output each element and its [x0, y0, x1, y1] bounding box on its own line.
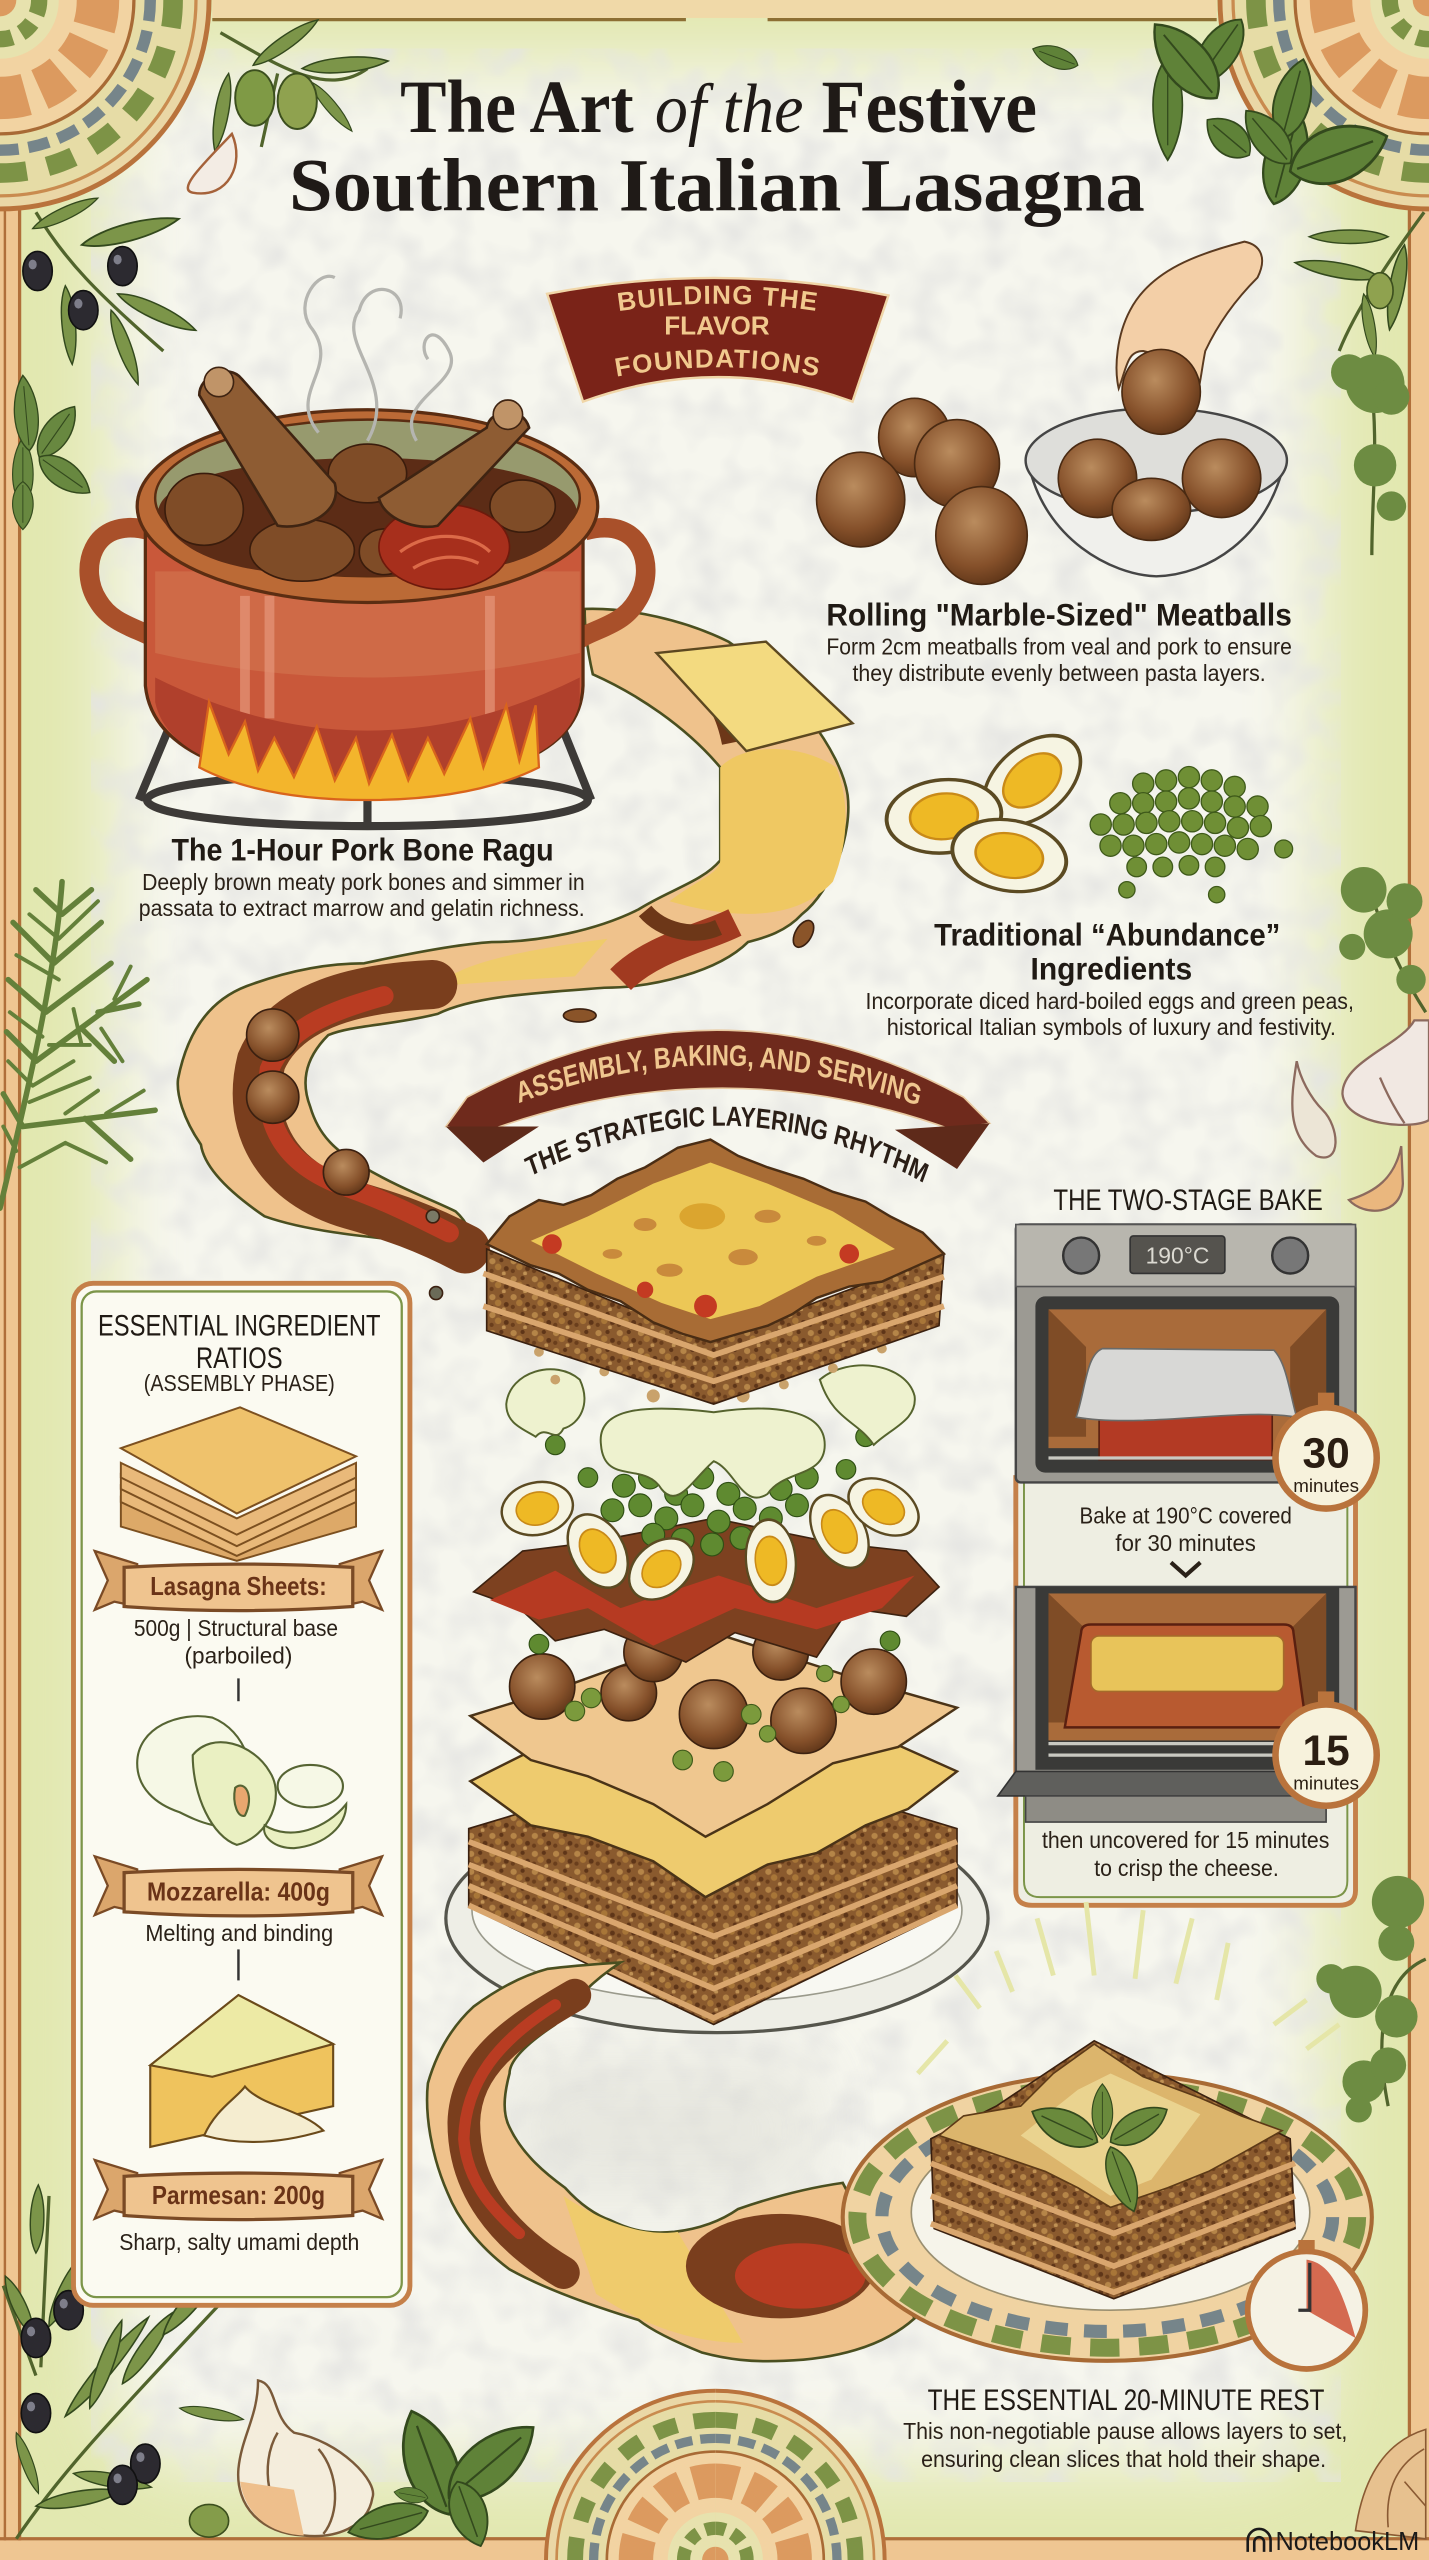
icon: twenty minute clock [1248, 2240, 1365, 2369]
hand holding meatball [1117, 242, 1262, 405]
text: panel heading: RATIOS [196, 1342, 283, 1375]
foliage: bottom left olive branch [0, 2185, 244, 2539]
text: rest description [903, 2418, 1347, 2472]
meatballs layer [510, 1623, 906, 1753]
text: ragu description [139, 869, 585, 921]
panel: two-stage bake [998, 1224, 1377, 1905]
corner tile: top left [0, 0, 209, 209]
illustration: hard-boiled eggs [884, 718, 1097, 900]
pot handles [89, 528, 646, 645]
text: meatballs heading: Rolling "Marble-Sized" Meatballs [826, 597, 1292, 632]
top baked lasagna body [487, 1249, 944, 1404]
pot rim and stew [137, 410, 598, 602]
banner: building the flavor foundations: BUILDING THE [618, 286, 817, 311]
oven: stage one: 190°C [1146, 1243, 1209, 1269]
text: stage two caption [1042, 1827, 1329, 1881]
text: stage one caption: Bake at 190°C covered [1080, 1502, 1292, 1528]
label: lasagna sheets [95, 1551, 382, 1611]
foliage: right parsley upper [1331, 354, 1409, 555]
illustration: rays above resting slice [918, 1902, 1339, 2073]
text: ragu heading: The 1-Hour Pork Bone Ragu [171, 832, 554, 867]
text: abundance heading: Ingredients [1031, 952, 1192, 987]
title [289, 66, 1145, 228]
icon: garlic bulb bottom [238, 2380, 373, 2536]
label: mozzarella: Mozzarella: 400g [147, 1876, 330, 1906]
banner: assembly baking and serving [444, 1029, 992, 1169]
text: rest heading: THE ESSENTIAL 20-MINUTE REST [928, 2384, 1325, 2417]
text: meatballs description: they distribute evenly between pasta layers. [853, 660, 1266, 686]
timer: 30 minutes [1275, 1393, 1377, 1509]
pasta sheet on ribbon upper [657, 642, 853, 751]
illustration: finished lasagna on tiled plate [843, 2041, 1372, 2361]
label: parmesan: Parmesan: 200g [152, 2180, 325, 2210]
corner tile: bottom centre [546, 2391, 885, 2560]
pork bones [199, 371, 336, 527]
illustration: ragu pot on burner [89, 276, 646, 826]
ornament: bottom right filigree [1356, 2429, 1426, 2539]
steam [305, 276, 452, 441]
text: lasagna sheets detail: (parboiled) [185, 1643, 292, 1669]
text: abundance heading: Traditional “Abundance” [934, 917, 1280, 952]
icon: garlic right [1292, 1020, 1429, 1211]
timer: 30 minutes: minutes [1293, 1475, 1359, 1496]
decorated plate [843, 2073, 1372, 2361]
foliage: left basil [11, 374, 97, 530]
corner tile: top right [1220, 0, 1429, 209]
text: stage two caption: then uncovered for 15 minutes [1042, 1827, 1329, 1853]
title: The Art [400, 66, 634, 149]
text: ragu description: passata to extract marrow and gelatin richness. [139, 895, 585, 921]
small peas on sheet [565, 1665, 849, 1781]
ragu layer [474, 1518, 939, 1662]
text: lasagna sheets detail: 500g | Structural base [134, 1615, 338, 1641]
text: meatballs description: Form 2cm meatballs from veal and pork to ensure [826, 634, 1292, 660]
text: abundance description: historical Italian symbols of luxury and festivity. [887, 1014, 1336, 1040]
meatball pasta sheet [470, 1633, 957, 1837]
pot body [145, 519, 583, 787]
text: parmesan detail: Sharp, salty umami depth [119, 2229, 359, 2255]
pasta ribbon flowing from pot to layered lasagna [178, 609, 848, 1256]
illustration: meatballs and bowl [817, 242, 1287, 584]
bowl [1029, 465, 1284, 576]
foliage: bottom basil [344, 2403, 548, 2552]
foliage: left olive branch [23, 193, 199, 387]
oven: stage one [1016, 1224, 1356, 1482]
foliage: top left olive branch [208, 14, 389, 152]
text: stage one caption: for 30 minutes [1115, 1530, 1256, 1556]
label: parmesan [95, 2160, 382, 2220]
icon: mozzarella [137, 1716, 346, 1848]
flames [199, 702, 539, 800]
banner: assembly baking and serving: ASSEMBLY, BAKING, AND SERVING [519, 1045, 921, 1104]
basil garnish [1025, 2084, 1174, 2216]
text: strategic layering rhythm: THE STRATEGIC LAYERING RHYTHM [524, 1106, 929, 1182]
oven: stage two [998, 1587, 1364, 1822]
banner: building the flavor foundations [546, 276, 890, 404]
icon: parmesan wedge [150, 1995, 333, 2147]
text: panel heading: ESSENTIAL INGREDIENT [98, 1310, 381, 1343]
text: panel heading: (ASSEMBLY PHASE) [144, 1370, 335, 1396]
green peas layer [529, 1427, 900, 1654]
text: panel heading [98, 1310, 381, 1396]
text: stage two caption: to crisp the cheese. [1094, 1855, 1279, 1881]
label: lasagna sheets: Lasagna Sheets: [150, 1571, 327, 1601]
text: rest description: ensuring clean slices that hold their shape. [921, 2446, 1326, 2472]
foliage: right parsley lower [1316, 1876, 1426, 2122]
crumbs [534, 1344, 887, 1402]
illustration: green peas [1090, 767, 1293, 903]
text: ragu description: Deeply brown meaty pork bones and simmer in [142, 869, 585, 895]
lasagna slice [931, 2041, 1295, 2299]
banner: building the flavor foundations: FLAVOR [664, 311, 770, 341]
foliage: right olive branch [1294, 212, 1424, 359]
top cheese surface [487, 1140, 944, 1342]
essential ingredient ratios panel [73, 1283, 410, 2305]
title: of the [655, 70, 804, 148]
bottom meat stack [469, 1755, 957, 2024]
plate [446, 1804, 988, 2033]
loose meatballs [817, 398, 1027, 584]
text: abundance description: Incorporate diced hard-boiled eggs and green peas, [866, 988, 1354, 1014]
text: mozzarella detail: Melting and binding [145, 1920, 333, 1946]
label: mozzarella [95, 1856, 382, 1916]
text: abundance description [866, 988, 1354, 1040]
timer: 15 minutes: minutes [1293, 1772, 1359, 1793]
title: Festive [821, 66, 1037, 149]
text: rest description: This non-negotiable pause allows layers to set, [903, 2418, 1347, 2444]
notebooklm badge: NotebookLM [1275, 2526, 1419, 2556]
text: lasagna sheets detail [134, 1615, 338, 1669]
title: Southern Italian Lasagna [289, 145, 1145, 228]
text: meatballs description [826, 634, 1292, 686]
foliage: right parsley middle [1339, 867, 1426, 1012]
eggs on ragu [497, 1476, 578, 1542]
ribbon meatballs and crumbs [247, 917, 818, 1300]
foliage: left rosemary [0, 882, 155, 1208]
icon: garlic clove top left [188, 134, 236, 193]
burner grate [139, 710, 591, 826]
icon: lasagna sheets stack [121, 1407, 356, 1561]
timer: 15 minutes: 15 [1302, 1727, 1350, 1774]
illustration: exploded lasagna layers [446, 1140, 988, 2033]
banner: building the flavor foundations: FOUNDATIONS [615, 349, 819, 376]
foliage: top right basil and leaves [1029, 9, 1396, 209]
pasta ribbon flowing from plate to finished slice [427, 1962, 915, 2361]
timer: 30 minutes: 30 [1302, 1430, 1350, 1477]
timer: 15 minutes [1275, 1691, 1377, 1806]
mozzarella blobs [506, 1365, 915, 1498]
yellow pasta sheet [470, 1731, 957, 1897]
text: stage one caption [1080, 1502, 1292, 1556]
text: two-stage bake heading: THE TWO-STAGE BAKE [1053, 1184, 1323, 1217]
text: abundance heading [934, 917, 1280, 987]
arrow: chevron down [1171, 1562, 1200, 1576]
